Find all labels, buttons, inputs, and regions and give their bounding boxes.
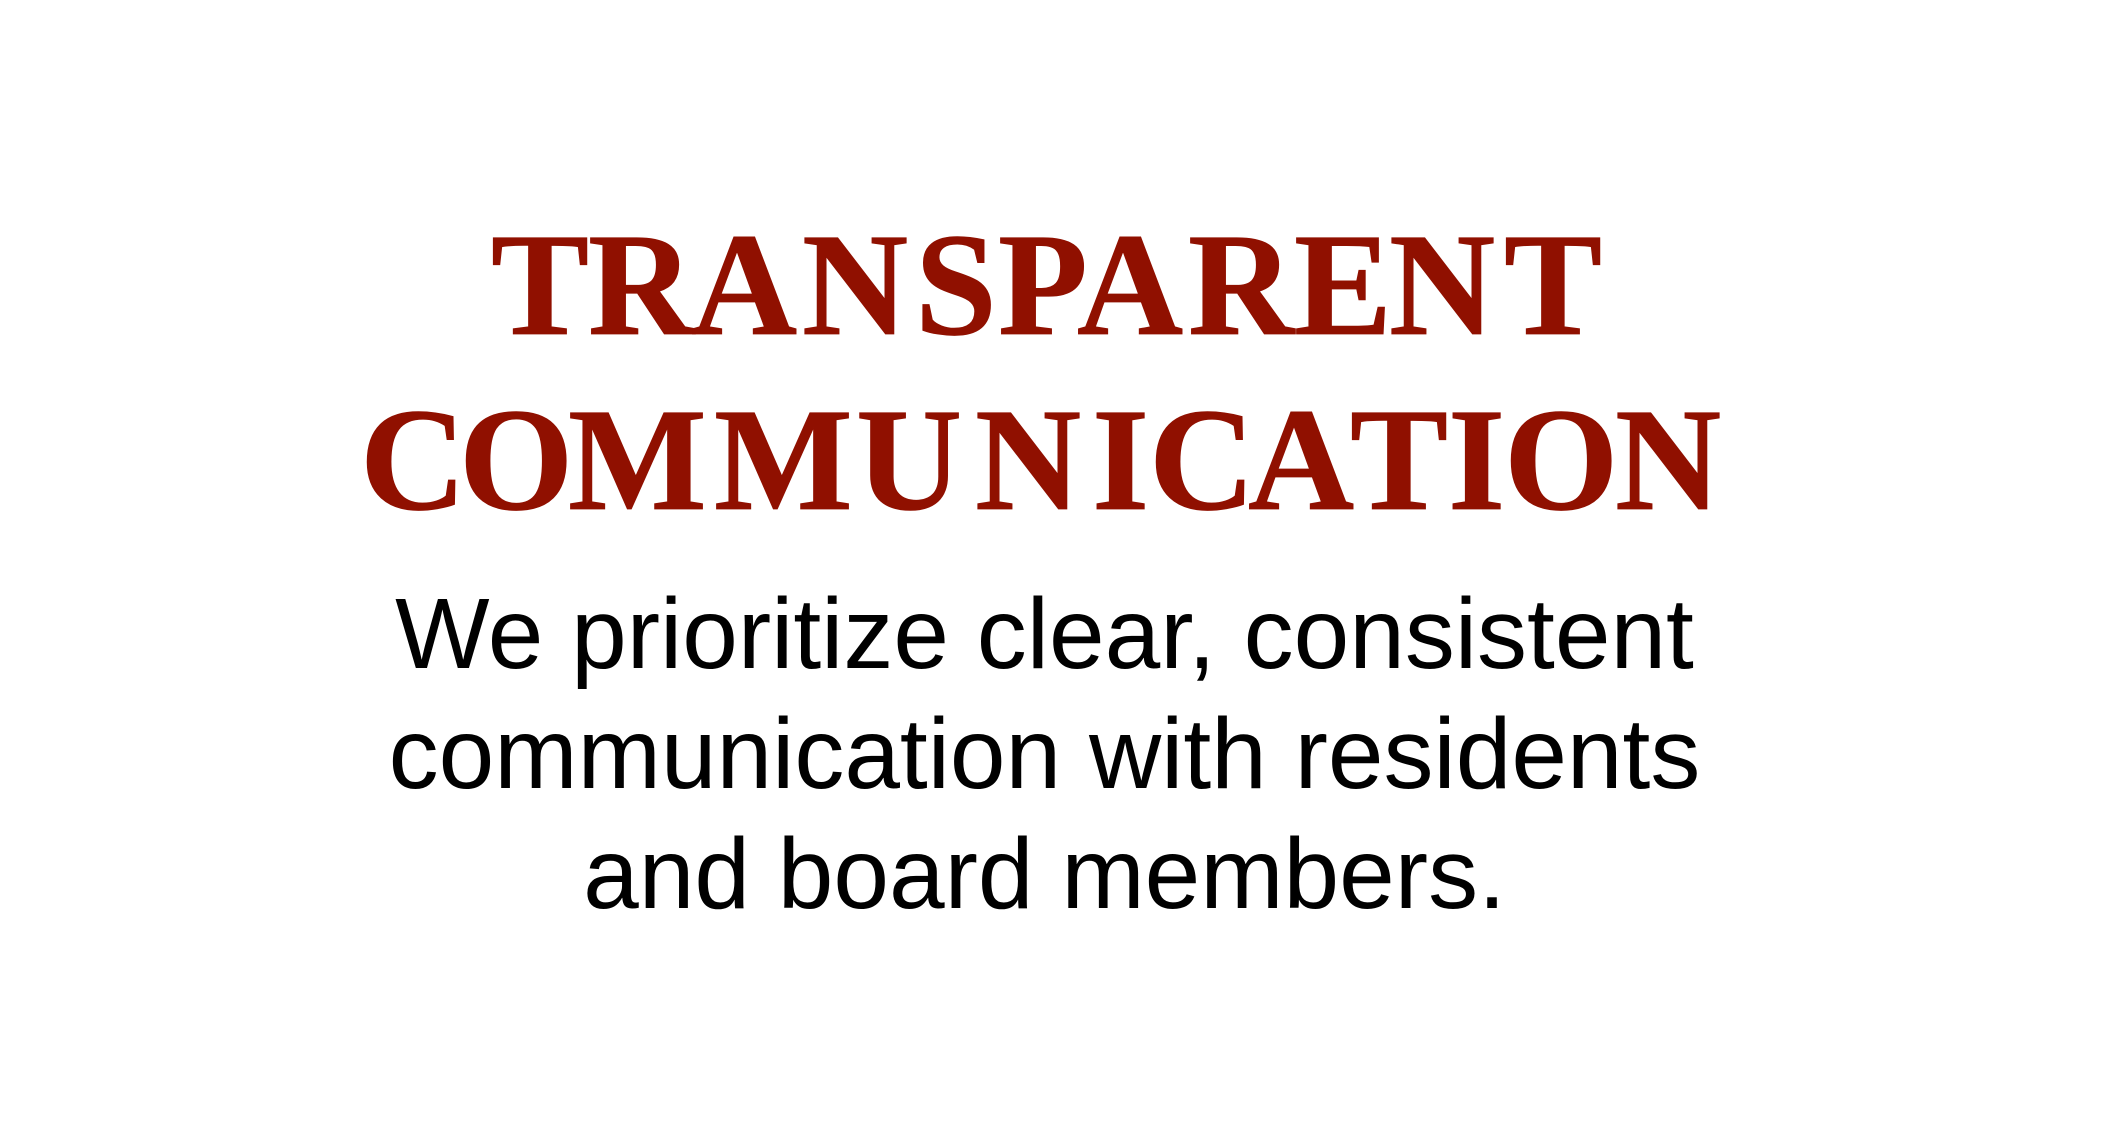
title: COMMUNICATION xyxy=(360,378,1721,541)
title: TRANSPARENT xyxy=(491,203,1602,366)
description text: and board members. xyxy=(583,818,1506,930)
description text: communication with residents xyxy=(389,698,1700,810)
description text xyxy=(389,578,1700,930)
title xyxy=(360,203,1721,541)
description text: We prioritize clear, consistent xyxy=(395,578,1694,690)
